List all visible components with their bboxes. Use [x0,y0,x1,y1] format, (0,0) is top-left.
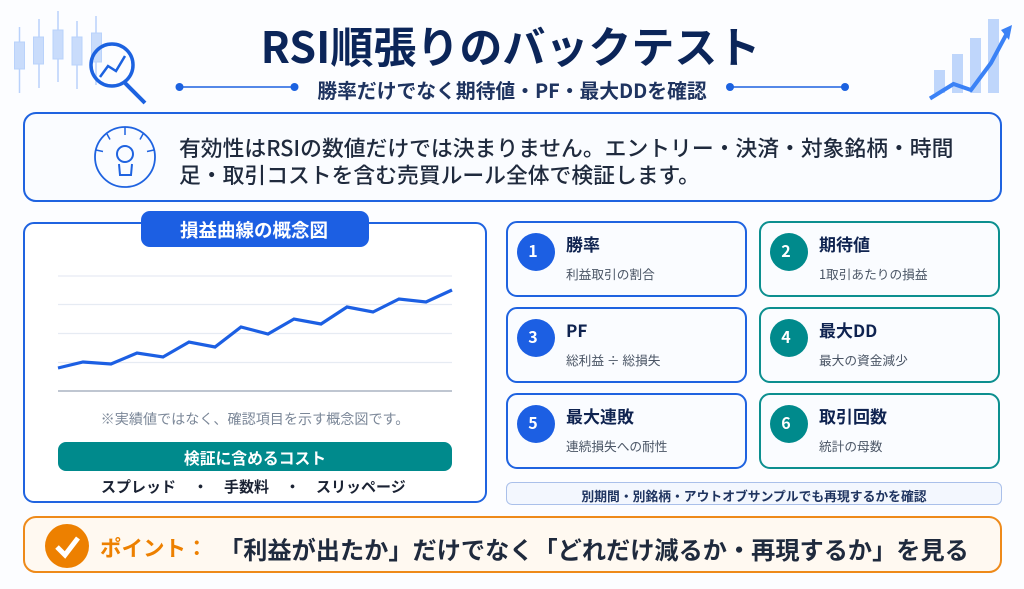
card 4: max drawdown: 4 [781,324,791,348]
subtitle: 勝率だけでなく期待値・PF・最大DDを確認 [317,75,707,104]
card 6: trade count: 取引回数 [819,403,887,428]
card 5: max losing streak: 連続損失への耐性 [566,436,668,455]
card 4: max drawdown: 最大DD [819,317,877,342]
icon: check mark [45,524,89,568]
card 1: win rate: 1 [528,238,538,262]
card 2: expected value: 1取引あたりの損益 [819,264,928,283]
card 6: trade count: 統計の母数 [819,436,882,455]
card 2: expected value: 2 [781,238,791,262]
card 6: trade count [759,393,1000,469]
intro text: 足・取引コストを含む売買ルール全体で検証します。 [179,159,700,190]
card 2: expected value: 期待値 [819,231,870,256]
card 5: max losing streak: 5 [528,410,538,434]
card 4: max drawdown: 最大の資金減少 [819,350,908,369]
cost items: スプレッド [101,476,176,497]
card 3: profit factor: 3 [528,324,538,348]
divider: left ornament [176,83,298,91]
chart note: ※実績値ではなく、確認項目を示す概念図です。 [101,409,409,429]
cost items [101,476,406,497]
point label: ポイント： [100,532,208,563]
card 3: profit factor: 総利益 ÷ 総損失 [566,350,660,369]
card 6: trade count: 6 [781,410,791,434]
icon: candlesticks with magnifier [14,11,146,104]
point message: 「利益が出たか」だけでなく「どれだけ減るか・再現するか」を見る [219,531,969,566]
card 3: profit factor: PF [566,317,587,342]
panel heading: equity curve [141,211,369,247]
icon: gauge with bulb [94,126,156,188]
divider: right ornament [726,83,849,91]
cost items: スリッページ [316,476,406,497]
intro text: 有効性はRSIの数値だけでは決まりません。エントリー・決済・対象銘柄・時間 [179,132,953,163]
card 3: profit factor [506,307,747,383]
line chart: equity curve [58,276,453,392]
cost items: ・ [285,476,300,497]
reproducibility note: 別期間・別銘柄・アウトオブサンプルでも再現するかを確認 [581,486,927,505]
card 5: max losing streak: 最大連敗 [566,403,634,428]
icon: rising bars with arrow [929,19,1012,100]
card 5: max losing streak [506,393,747,469]
cost heading bar [58,442,452,471]
intro text [179,132,953,190]
card 2: expected value [759,221,1000,297]
cost heading bar: 検証に含めるコスト [184,446,326,469]
panel: intro message [23,112,1002,202]
title: RSI順張りのバックテスト [261,14,760,76]
card 1: win rate: 利益取引の割合 [566,264,655,283]
reproducibility note [506,482,1002,505]
card 1: win rate: 勝率 [566,231,600,256]
panel heading: equity curve: 損益曲線の概念図 [180,217,328,243]
panel: equity curve concept [23,222,487,503]
cost items: 手数料 [224,476,269,497]
card 1: win rate [506,221,747,297]
panel: key point [23,516,1002,573]
cost items: ・ [193,476,208,497]
card 4: max drawdown [759,307,1000,383]
